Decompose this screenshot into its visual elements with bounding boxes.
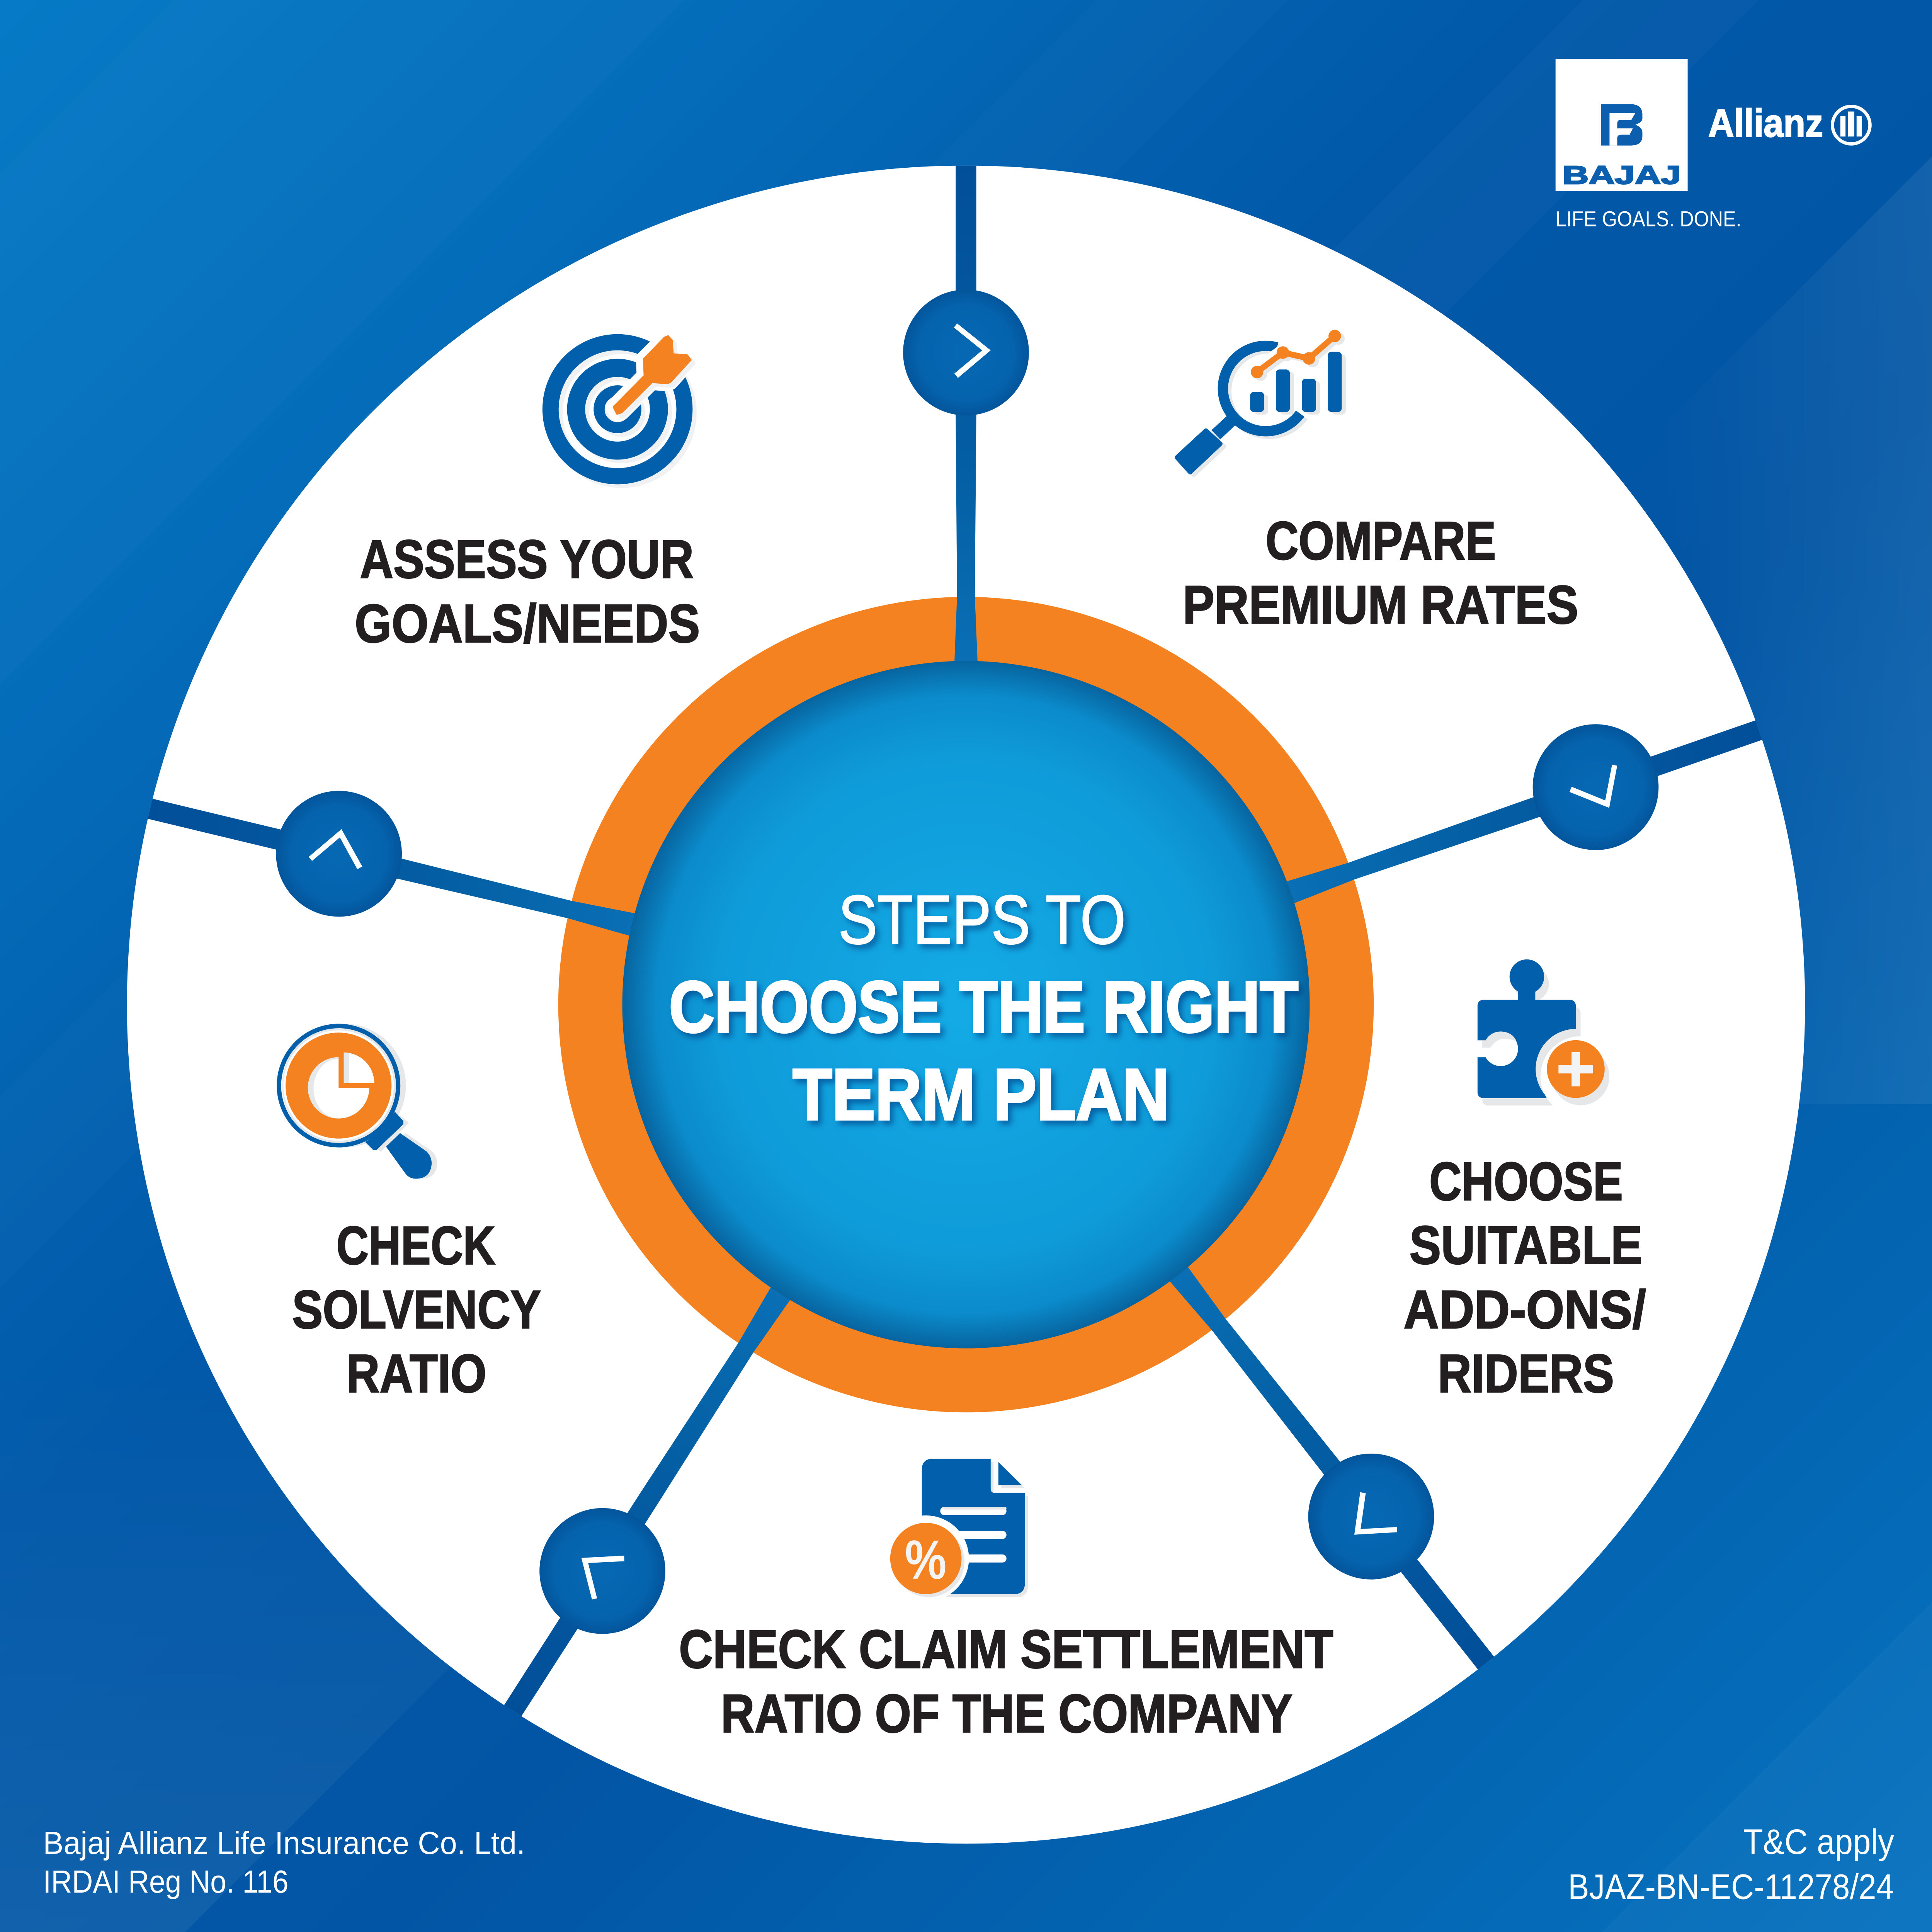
icon: document with percent (883, 1459, 1028, 1602)
label: claim settlement: RATIO OF THE COMPANY (721, 1683, 1293, 1744)
icon: puzzle piece with plus (1478, 959, 1610, 1105)
tagline: LIFE GOALS. DONE. (1556, 207, 1742, 231)
label: assess goals: ASSESS YOUR (360, 529, 694, 589)
arrow: right (1510, 702, 1681, 872)
label: solvency ratio: SOLVENCY (292, 1279, 541, 1340)
label: choose add-ons: ADD-ONS/ (1403, 1279, 1646, 1340)
icon: magnifier with chart (1177, 330, 1346, 475)
label: claim settlement: CHECK CLAIM SETTLEMENT (679, 1619, 1333, 1679)
label: compare premium (1183, 510, 1578, 635)
center title: TERM PLAN (793, 1054, 1169, 1135)
footer: company details: IRDAI Reg No. 116 (43, 1864, 289, 1900)
label: compare premium: COMPARE (1265, 510, 1496, 571)
footer: company details: Bajaj Allianz Life Insurance Co. Ltd. (43, 1825, 525, 1861)
wheel (127, 166, 1805, 1844)
label: solvency ratio: CHECK (336, 1215, 495, 1276)
footer: terms and code (1568, 1822, 1894, 1906)
label: claim settlement (679, 1619, 1333, 1744)
label: choose add-ons (1403, 1151, 1646, 1404)
label: solvency ratio (292, 1215, 541, 1404)
label: compare premium: PREMIUM RATES (1183, 574, 1578, 635)
center title: STEPS TO (838, 881, 1126, 958)
logo: Bajaj: BAJAJ (1563, 161, 1681, 190)
center title (669, 881, 1298, 1135)
center title: CHOOSE THE RIGHT (669, 966, 1298, 1047)
footer: terms and code: T&C apply (1743, 1822, 1894, 1862)
arrow: left (265, 780, 413, 927)
footer: company details (43, 1825, 525, 1900)
logo: Allianz: Allianz (1708, 102, 1823, 145)
arrow: bottom right (1282, 1428, 1460, 1605)
label: assess goals (355, 529, 700, 654)
label: choose add-ons: CHOOSE (1429, 1151, 1623, 1212)
label: choose add-ons: RIDERS (1438, 1343, 1614, 1404)
label: solvency ratio: RATIO (346, 1343, 486, 1404)
label: assess goals: GOALS/NEEDS (355, 593, 700, 654)
arrow: top (903, 290, 1029, 415)
dividers (148, 166, 1763, 1717)
footer: terms and code: BJAZ-BN-EC-11278/24 (1568, 1867, 1894, 1906)
icon: target and dart (551, 336, 694, 480)
label: choose add-ons: SUITABLE (1410, 1214, 1642, 1275)
icon: magnifier with pie chart (279, 1024, 437, 1179)
arrow: bottom left (514, 1483, 690, 1659)
orange ring (558, 597, 1374, 1412)
logo: Bajaj (1556, 59, 1688, 191)
icon: document with percent: % (905, 1529, 947, 1591)
center circle (622, 661, 1310, 1349)
